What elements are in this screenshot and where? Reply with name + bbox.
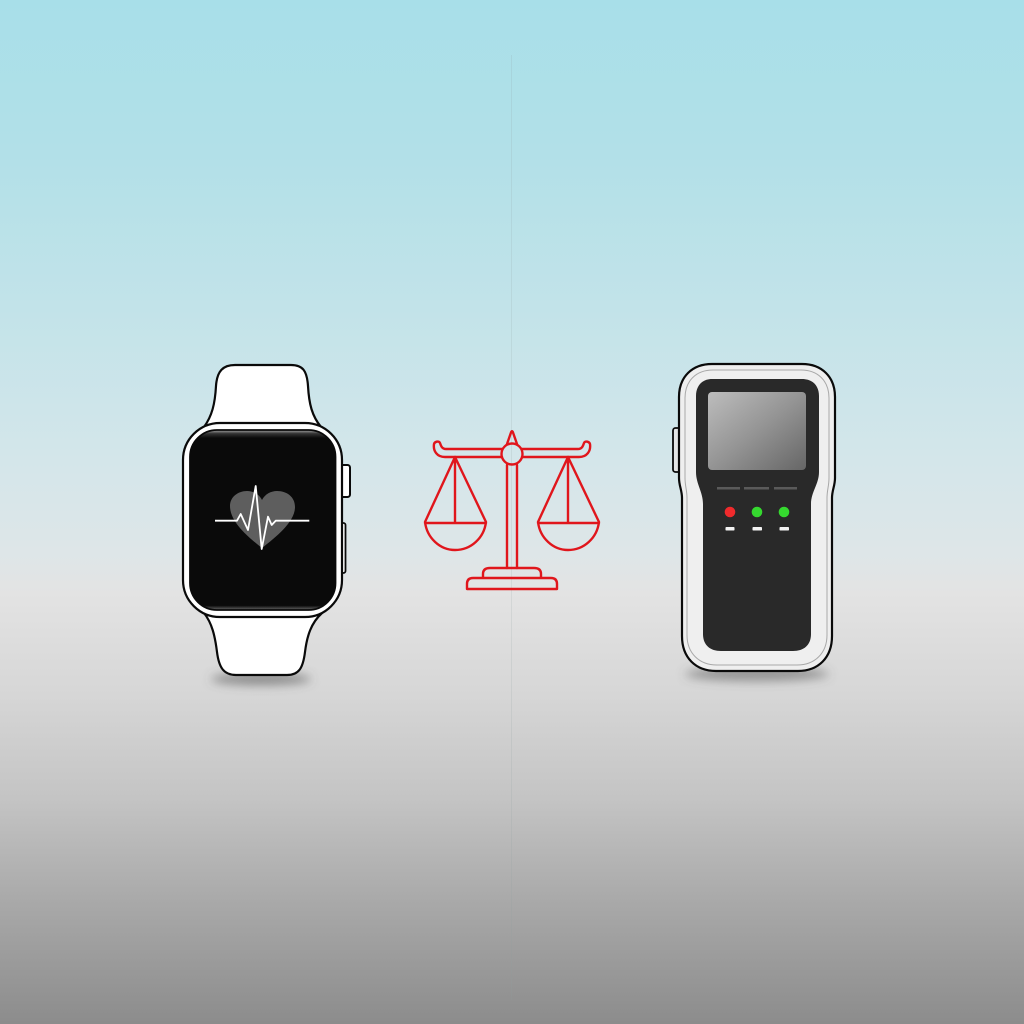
icon: handheld medical device <box>673 364 835 681</box>
device body <box>679 364 835 671</box>
watch bottom band <box>204 613 322 675</box>
left pan <box>425 457 486 550</box>
device dark panel <box>696 379 819 651</box>
center divider line <box>510 55 512 1000</box>
scale pivot <box>502 444 522 464</box>
device display <box>708 392 806 470</box>
scale base <box>467 568 557 589</box>
device status labels <box>726 527 789 530</box>
scale spike <box>507 431 517 444</box>
watch crown <box>340 465 350 497</box>
device shadow <box>685 667 829 681</box>
icon: balance scale <box>425 431 599 589</box>
watch screen <box>190 430 336 610</box>
device status lights <box>725 507 789 517</box>
heart icon <box>230 491 295 548</box>
device indicator bars <box>717 487 797 490</box>
watch side button <box>340 523 346 573</box>
watch top band <box>204 365 321 427</box>
scale column <box>507 465 517 568</box>
right pan <box>538 457 599 550</box>
device side button <box>673 428 681 472</box>
icon: smartwatch <box>183 365 350 685</box>
watch shadow <box>211 673 311 685</box>
watch case <box>183 423 342 617</box>
heartbeat line <box>215 486 309 549</box>
device inner outline <box>685 370 829 665</box>
scale beam <box>434 442 590 457</box>
